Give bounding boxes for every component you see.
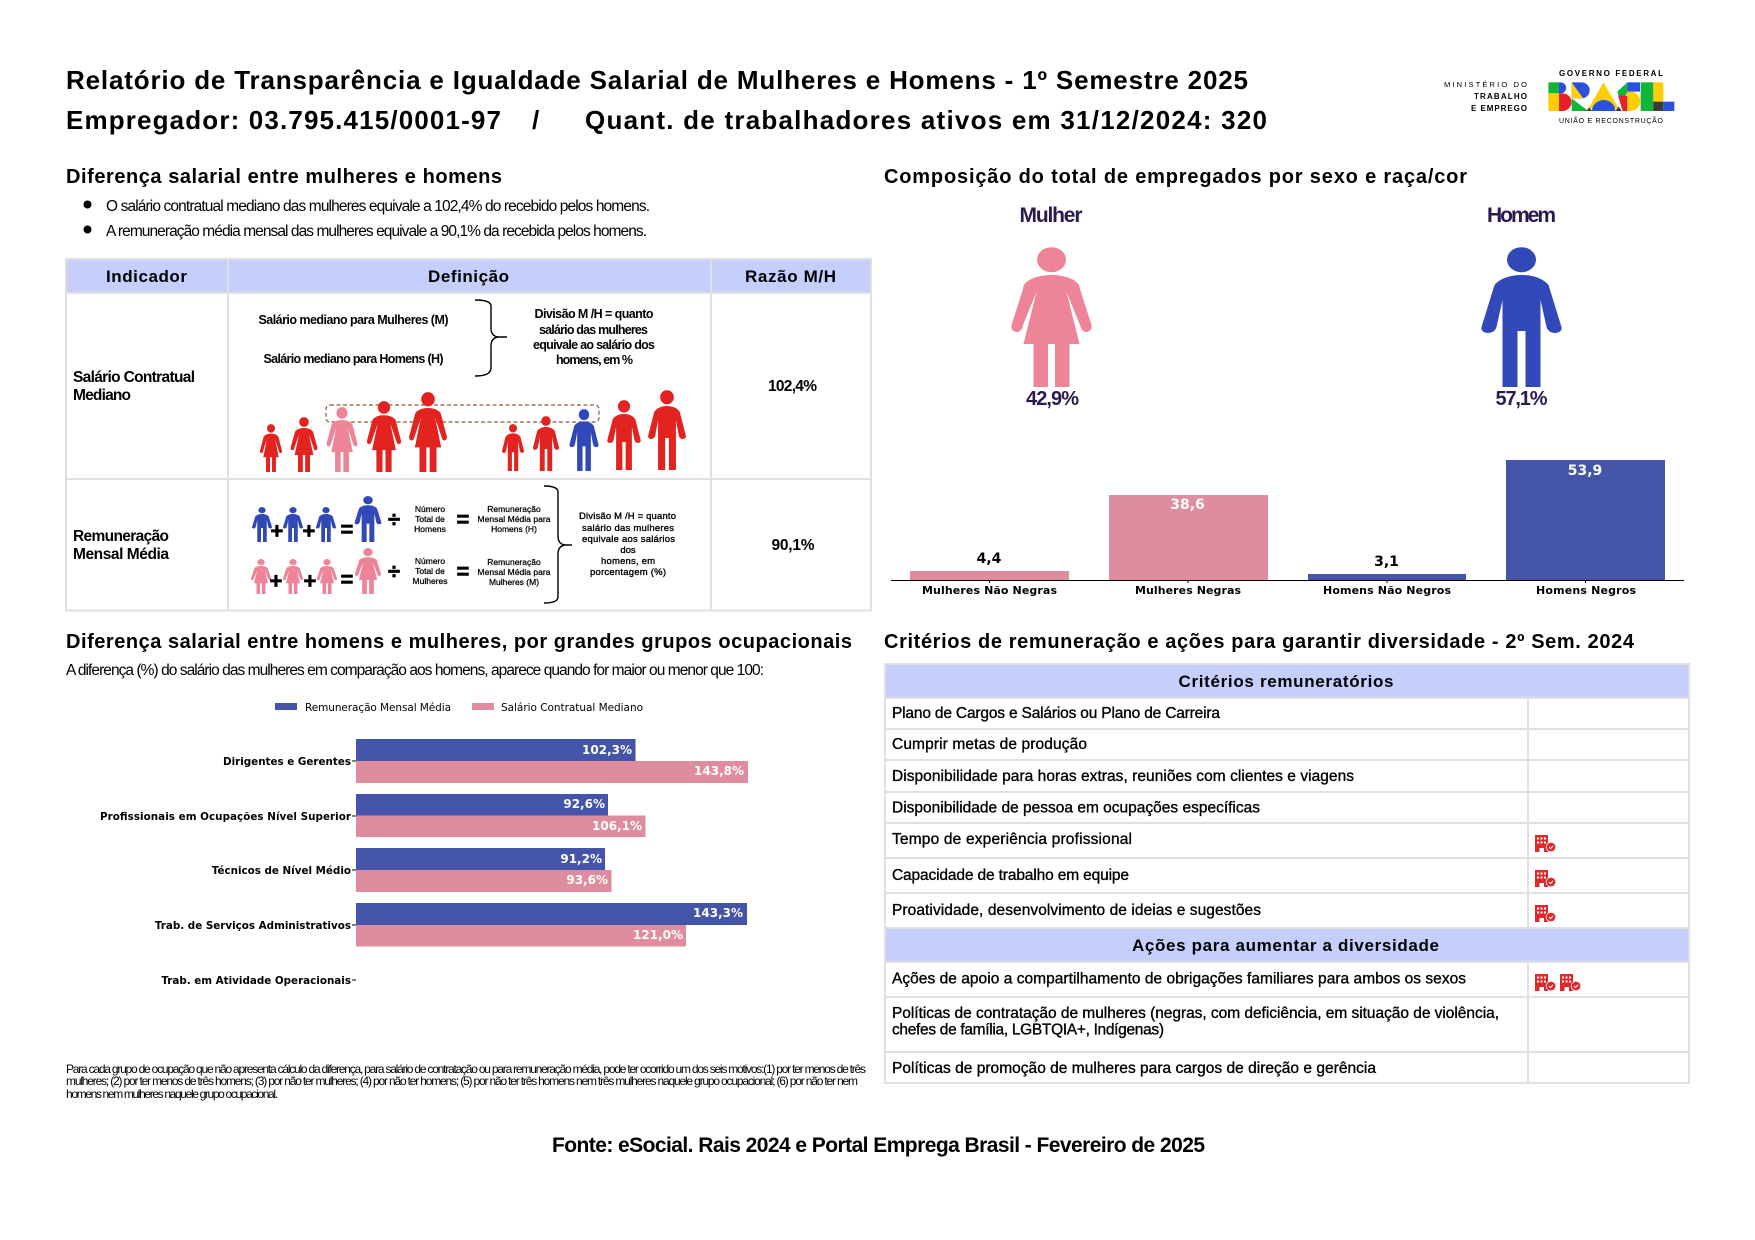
- formula: mulheres: +: [304, 568, 316, 594]
- logo: ministério e governo federal: UNIÃO E RECONSTRUÇÃO: [1559, 116, 1664, 125]
- formula: mulheres: [251, 548, 551, 594]
- criteria rows: Proatividade, desenvolvimento de ideias e sugestões: [892, 902, 1261, 919]
- formula: mulheres: Remuneração: [487, 557, 541, 567]
- action rows: Políticas de promoção de mulheres para cargos de direção e gerência: [892, 1060, 1376, 1077]
- table header: Razão M/H: [745, 267, 836, 286]
- formula: homens: ÷: [388, 507, 400, 532]
- bar chart: grupos ocupacionais: 143,8%: [694, 764, 744, 778]
- figure: mulher: Mulher: [1020, 204, 1082, 227]
- formula: mulheres: Número: [415, 556, 445, 566]
- figure: mulher: 42,9%: [1026, 388, 1079, 410]
- bar chart: grupos ocupacionais: 93,6%: [566, 873, 608, 887]
- row label: salário contratual mediano: Mediano: [73, 387, 131, 404]
- header: ações para aumentar a diversidade: Ações para aumentar a diversidade: [1132, 936, 1439, 955]
- bar chart: composição por sexo e raça: Mulheres Negras: [1135, 584, 1241, 597]
- bar chart: grupos ocupacionais: 143,3%: [693, 906, 743, 920]
- definition text: remuneração média: salário das mulheres: [582, 523, 674, 534]
- value: 102,4%: 102,4%: [768, 378, 817, 395]
- criteria rows: Tempo de experiência profissional: [892, 831, 1132, 848]
- footnote: mulheres; (2) por ter menos de três homens; (3) por não ter mulheres; (4) por não ter homens; (5) por não ter três homens nem três mulheres naquele grupo ocupacional; (6) por não ter nem: [66, 1074, 858, 1088]
- heading: diferença salarial: Diferença salarial entre mulheres e homens: [66, 166, 502, 188]
- definition text: salário mediano: Salário mediano para Mulheres (M): [258, 313, 448, 327]
- table header: [106, 267, 836, 286]
- formula: homens: Homens: [414, 524, 446, 534]
- table header: Definição: [428, 267, 509, 286]
- bar chart: grupos ocupacionais: 121,0%: [633, 928, 683, 942]
- bar chart: grupos ocupacionais: 106,1%: [592, 819, 642, 833]
- title: Empregador: 03.795.415/0001-97: [66, 105, 501, 135]
- bar chart: composição por sexo e raça: 38,6: [1170, 497, 1205, 513]
- icons: empresa com selo: [1535, 835, 1581, 991]
- bar chart: composição por sexo e raça: 53,9: [1568, 463, 1602, 479]
- logo: ministério e governo federal: MINISTÉRIO DO: [1444, 80, 1527, 89]
- bullet list: A remuneração média mensal das mulheres equivale a 90,1% da recebida pelos homens.: [106, 223, 647, 240]
- formula: homens: Mensal Média para: [478, 514, 551, 524]
- bar chart: composição por sexo e raça: Homens Não Negros: [1323, 584, 1451, 597]
- definition text: remuneração média: dos: [620, 545, 636, 556]
- bar chart: composição por sexo e raça: 4,4: [977, 551, 1002, 567]
- subtext: A diferença (%) do salário das mulheres em comparação aos homens, aparece quando for maior ou menor que 100:: [66, 662, 764, 679]
- bullet list: [84, 198, 650, 240]
- heading: composição: Composição do total de empregados por sexo e raça/cor: [884, 166, 1467, 188]
- legend: [275, 702, 643, 714]
- action rows: Ações de apoio a compartilhamento de obrigações familiares para ambos os sexos: [892, 970, 1466, 988]
- row label: remuneração mensal média: Remuneração: [73, 528, 169, 545]
- formula: homens: =: [456, 507, 469, 532]
- criteria rows: Cumprir metas de produção: [892, 736, 1087, 753]
- definition text: salário mediano: Divisão M /H = quanto: [534, 307, 654, 321]
- row label: salário contratual mediano: Salário Contratual: [73, 369, 195, 386]
- bar chart: grupos ocupacionais: [100, 739, 748, 987]
- footnote: homens nem mulheres naquele grupo ocupacional.: [66, 1087, 278, 1101]
- row label: remuneração mensal média: Mensal Média: [73, 546, 169, 563]
- definition text: remuneração média: [544, 486, 676, 603]
- formula: homens: Remuneração: [487, 504, 541, 514]
- row label: salário contratual mediano: [73, 369, 195, 404]
- icons: homens em fila: [502, 390, 686, 471]
- bar chart: grupos ocupacionais: Dirigentes e Gerentes: [223, 756, 351, 768]
- value: 90,1%: 90,1%: [772, 537, 815, 554]
- criteria rows: [892, 705, 1354, 919]
- definition text: remuneração média: equivale aos salários: [582, 534, 675, 545]
- definition text: salário mediano: equivale ao salário dos: [533, 338, 655, 352]
- formula: homens: =: [340, 517, 353, 542]
- criteria rows: Disponibilidade de pessoa em ocupações específicas: [892, 800, 1260, 816]
- bar chart: grupos ocupacionais: Trab. de Serviços Administrativos: [155, 920, 351, 932]
- definition text: remuneração média: Divisão M /H = quanto: [579, 511, 676, 522]
- figure: mulher: [1011, 204, 1092, 410]
- criteria rows: Disponibilidade para horas extras, reuniões com clientes e viagens: [892, 768, 1354, 785]
- source line: Fonte: eSocial. Rais 2024 e Portal Emprega Brasil - Fevereiro de 2025: [552, 1134, 1205, 1157]
- bar chart: composição por sexo e raça: Homens Negros: [1536, 584, 1636, 597]
- title: /: [532, 105, 539, 135]
- title: Relatório de Transparência e Igualdade Salarial de Mulheres e Homens - 1º Semestre 2025: [66, 65, 1248, 95]
- definition text: remuneração média: homens, em: [601, 556, 655, 567]
- title: [66, 65, 1267, 135]
- formula: homens: +: [270, 518, 283, 544]
- definition text: salário mediano: Salário mediano para Homens (H): [264, 352, 444, 366]
- bar chart: composição por sexo e raça: 3,1: [1374, 554, 1399, 570]
- bar chart: grupos ocupacionais: Trab. em Atividade Operacionais: [161, 975, 351, 987]
- formula: mulheres: Mulheres (M): [489, 577, 539, 587]
- definition text: salário mediano: homens, em %: [556, 353, 633, 367]
- bar chart: grupos ocupacionais: 102,3%: [582, 743, 632, 757]
- criteria rows: Plano de Cargos e Salários ou Plano de Carreira: [892, 705, 1220, 722]
- bullet list: O salário contratual mediano das mulheres equivale a 102,4% do recebido pelos homens.: [106, 198, 650, 215]
- legend: Salário Contratual Mediano: [501, 702, 643, 714]
- heading: critérios: Critérios de remuneração e ações para garantir diversidade - 2º Sem. 2024: [884, 631, 1635, 653]
- logo: ministério e governo federal: [1444, 69, 1674, 125]
- icons: mulheres em fila: [260, 392, 447, 472]
- figure: homem: Homem: [1487, 204, 1556, 227]
- logo: ministério e governo federal: GOVERNO FEDERAL: [1559, 69, 1663, 78]
- action rows: chefes de família, LGBTQIA+, Indígenas): [892, 1022, 1164, 1038]
- table header: Indicador: [106, 267, 187, 286]
- legend: Remuneração Mensal Média: [305, 702, 451, 714]
- title: Quant. de trabalhadores ativos em 31/12/2024: 320: [585, 105, 1267, 135]
- formula: mulheres: Total de: [415, 566, 445, 576]
- bar chart: grupos ocupacionais: 91,2%: [560, 852, 602, 866]
- formula: homens: [252, 496, 551, 544]
- formula: mulheres: =: [340, 567, 353, 592]
- definition text: salário mediano: [258, 300, 655, 376]
- logo: ministério e governo federal: E EMPREGO: [1471, 104, 1527, 113]
- panel: tabela de indicadores: [66, 259, 871, 610]
- action rows: [892, 970, 1499, 1077]
- definition text: salário mediano: salário das mulheres: [539, 323, 648, 337]
- formula: homens: Número: [415, 504, 445, 514]
- action rows: Políticas de contratação de mulheres (negras, com deficiência, em situação de violência,: [892, 1005, 1499, 1022]
- footnote: Para cada grupo de ocupação que não apresenta cálculo da diferença, para salário de contratação ou para remuneração média, pode ter ocorrido um dos seis motivos:(1) por ter menos de três: [66, 1062, 866, 1076]
- formula: homens: Homens (H): [491, 524, 537, 534]
- header: critérios remuneratórios: Critérios remuneratórios: [1178, 672, 1394, 691]
- definition text: remuneração média: porcentagem (%): [590, 567, 666, 578]
- figure: homem: [1481, 204, 1562, 410]
- formula: mulheres: ÷: [388, 559, 400, 584]
- formula: mulheres: +: [270, 568, 282, 594]
- formula: mulheres: Mulheres: [413, 576, 447, 586]
- footnote: [66, 1062, 866, 1101]
- row label: remuneração mensal média: [73, 528, 169, 563]
- formula: homens: Total de: [415, 514, 445, 524]
- bar chart: composição por sexo e raça: [891, 460, 1684, 597]
- logo: ministério e governo federal: TRABALHO: [1474, 92, 1527, 101]
- formula: mulheres: =: [456, 559, 469, 584]
- bar chart: grupos ocupacionais: 92,6%: [563, 797, 605, 811]
- formula: homens: +: [302, 518, 315, 544]
- bar chart: grupos ocupacionais: Técnicos de Nível Médio: [212, 865, 351, 877]
- figure: homem: 57,1%: [1496, 388, 1548, 410]
- heading: grupos ocupacionais: Diferença salarial entre homens e mulheres, por grandes grupos ocupacionais: [66, 631, 852, 653]
- bar chart: composição por sexo e raça: Mulheres Não Negras: [922, 584, 1057, 597]
- dashed highlight of median: [326, 405, 599, 422]
- criteria rows: Capacidade de trabalho em equipe: [892, 867, 1129, 884]
- bar chart: grupos ocupacionais: Profissionais em Ocupações Nível Superior: [100, 811, 352, 823]
- panel: tabela de critérios: [885, 664, 1689, 1083]
- formula: mulheres: Mensal Média para: [478, 567, 551, 577]
